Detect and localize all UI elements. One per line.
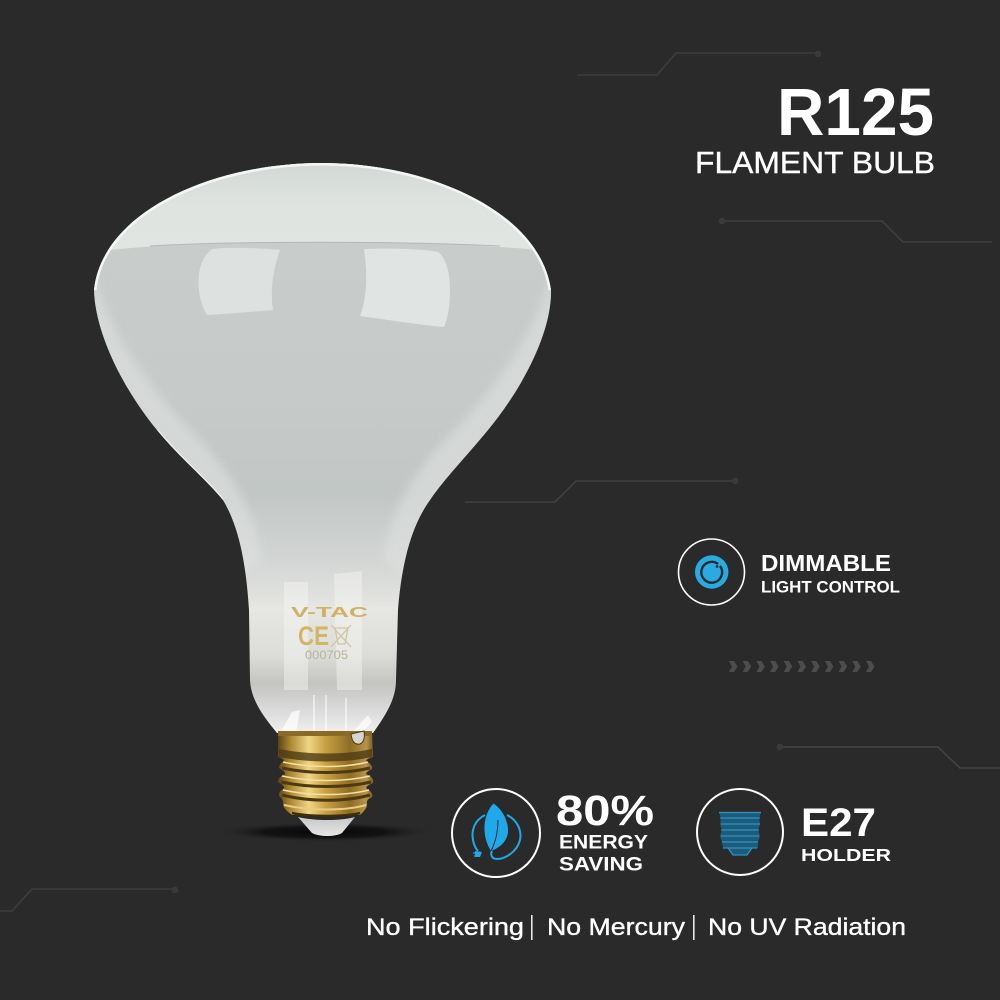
- feature label: dimmable: DIMMABLE: [761, 550, 891, 576]
- glass serial number: 000705: [305, 650, 348, 662]
- chevron row: [729, 661, 874, 672]
- right reflection window: [360, 249, 450, 327]
- stat: E27: E27: [801, 801, 876, 845]
- subtitle: FLAMENT BULB: [695, 146, 935, 180]
- neck reflection right: [334, 571, 362, 690]
- footer claims: No UV Radiation: [708, 914, 906, 941]
- circuit line: lower left: [0, 887, 178, 911]
- circuit line: upper right: [719, 218, 992, 242]
- brass screw base: [278, 731, 373, 816]
- flat filament highlights inside the neck: [313, 695, 315, 733]
- glass logo CE: CE: [298, 621, 329, 651]
- circuit line: lower right: [777, 744, 1000, 768]
- circuit line: top: [577, 51, 821, 75]
- glass contact tip: [298, 817, 355, 836]
- bulb glass body: [90, 160, 560, 740]
- icon: dimmable: [678, 539, 744, 605]
- stat label: holder: HOLDER: [801, 845, 891, 865]
- icon: energy saving leaf: [452, 789, 540, 877]
- footer claims: No Mercury: [547, 914, 685, 941]
- stat label: saving: SAVING: [559, 854, 643, 876]
- glass logo WEEE: [331, 625, 351, 647]
- feature sublabel: light control: LIGHT CONTROL: [761, 578, 900, 596]
- footer claims: [366, 914, 906, 941]
- bulb shadow: [213, 822, 437, 842]
- bulb: [90, 160, 560, 836]
- neck reflection left: [284, 582, 308, 690]
- stat: 80%: 80%: [556, 788, 654, 835]
- circuit line: middle: [465, 478, 738, 502]
- footer claims: No Flickering: [366, 914, 524, 941]
- title: R125: [777, 75, 934, 150]
- stat label: energy: ENERGY: [559, 832, 648, 854]
- icon: E27 holder: [697, 789, 783, 875]
- left reflection window: [198, 248, 280, 315]
- glass logo V-TAC: V-TAC: [291, 604, 368, 621]
